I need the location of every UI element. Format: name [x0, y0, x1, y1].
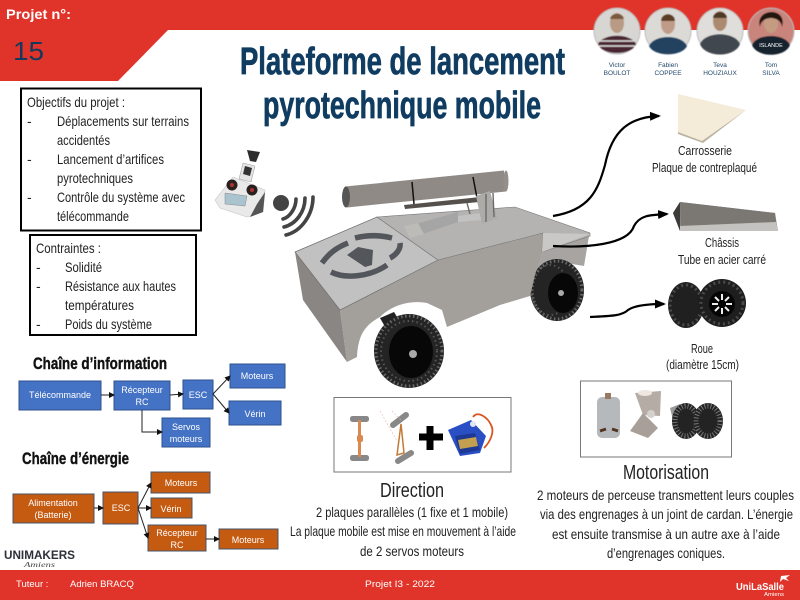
drivetrain text block: d’engrenages coniques.	[607, 545, 725, 561]
tutor label: Tuteur :	[16, 579, 48, 590]
icon: pivoting axle	[380, 411, 411, 461]
panel: project objectives: -	[27, 113, 32, 129]
panel: constraints: températures	[65, 297, 134, 313]
label: project number heading: Projet n°:	[6, 6, 71, 22]
rear wheel	[530, 259, 584, 321]
project number: 15	[13, 36, 44, 66]
logo: Unimakers	[4, 548, 75, 569]
chart: energy chain: RC	[170, 540, 184, 550]
chart: energy chain: (Batterie)	[34, 510, 72, 520]
member: Victor Boulot: BOULOT	[604, 70, 630, 77]
icon: servo motor	[448, 414, 492, 456]
member: Teva Houziaux	[697, 8, 743, 77]
actuator and bracket	[404, 191, 497, 238]
panel: constraints: Poids du système	[65, 316, 152, 332]
component: plywood body	[652, 94, 757, 175]
component: wheels	[666, 279, 746, 372]
component: plywood body: Plaque de contreplaqué	[652, 160, 757, 175]
logo: Unimakers: UNIMAKERS	[4, 548, 75, 562]
hood with gear emblem	[295, 217, 438, 310]
title: Plateforme de lancement	[240, 41, 565, 83]
chart: energy chain	[13, 449, 278, 551]
drivetrain text block: Motorisation	[623, 462, 709, 484]
launch tube	[342, 170, 508, 209]
icon: wireless signal	[273, 195, 313, 235]
steering text block: de 2 servos moteurs	[360, 543, 464, 559]
heading: information chain: Chaîne d’information	[33, 354, 167, 373]
chart: information chain: Récepteur	[121, 385, 163, 395]
component: steel chassis tube: Tube en acier carré	[678, 252, 766, 267]
chart: information chain: Télécommande	[29, 390, 91, 400]
panel: constraints: -	[36, 259, 41, 275]
member: Tom Silva: ISLANDE	[759, 43, 783, 49]
rear body side	[535, 236, 589, 280]
steering text block: La plaque mobile est mise en mouvement à l’aide	[290, 523, 516, 539]
component: steel chassis tube: Châssis	[705, 235, 739, 250]
bottom red banner	[0, 570, 800, 600]
steering text block: Direction	[380, 480, 444, 502]
panel: project objectives: pyrotechniques	[57, 170, 133, 186]
arrow: to wheel	[590, 304, 664, 317]
member: Fabien Coppee: COPPEE	[654, 70, 682, 77]
logo: Unimakers: Amiens	[22, 561, 55, 569]
member: Tom Silva: Tom	[765, 62, 777, 69]
steering text block: 2 plaques parallèles (1 fixe et 1 mobile)	[316, 504, 508, 520]
panel: project objectives: Déplacements sur terrains	[57, 113, 189, 129]
title	[240, 41, 565, 127]
rear deck	[377, 207, 590, 260]
panel: project objectives	[21, 88, 201, 230]
chart: information chain: Vérin	[244, 409, 266, 419]
drivetrain text block	[537, 462, 794, 561]
icon: cardan joint	[630, 390, 661, 438]
logo: UniLaSalle: Amiens	[764, 592, 785, 598]
tutor name: Adrien BRACQ	[70, 579, 134, 590]
icon: remote control	[215, 150, 265, 217]
panel: project objectives: Lancement d’artifices	[57, 151, 164, 167]
chart: energy chain: Moteurs	[165, 478, 198, 488]
arrow: to chassis	[553, 214, 667, 247]
chart: energy chain: Moteurs	[232, 535, 265, 545]
member: Fabien Coppee	[645, 8, 691, 77]
icon: bevel gears	[670, 403, 723, 439]
member: Tom Silva	[748, 8, 794, 77]
panel: constraints: -	[36, 278, 41, 294]
panel: project objectives: télécommande	[57, 208, 129, 224]
steering text block	[290, 480, 516, 559]
panel: constraints	[30, 235, 196, 335]
logo: UniLaSalle	[736, 575, 790, 598]
title: pyrotechnique mobile	[263, 85, 541, 127]
panel: project objectives: accidentés	[57, 132, 110, 148]
front wheel	[374, 312, 444, 388]
chart: energy chain: Alimentation	[28, 498, 78, 508]
component: wheels: (diamètre 15cm)	[666, 357, 739, 372]
panel: project objectives: Contrôle du système avec	[57, 189, 185, 205]
arrow: to carrosserie	[553, 116, 659, 216]
panel: project objectives: -	[27, 189, 32, 205]
project year: Projet I3 - 2022	[365, 579, 435, 590]
member: Teva Houziaux: Teva	[713, 62, 727, 69]
chart: information chain	[19, 354, 285, 447]
member: Teva Houziaux: HOUZIAUX	[703, 70, 737, 77]
panel: constraints: Résistance aux hautes	[65, 278, 176, 294]
icon: drill motor	[597, 393, 620, 438]
chart: information chain: Moteurs	[241, 371, 274, 381]
panel: constraints: -	[36, 316, 41, 332]
body side	[340, 233, 543, 362]
team members	[594, 8, 794, 77]
member: Victor Boulot	[594, 8, 640, 77]
member: Victor Boulot: Victor	[609, 62, 626, 69]
logo: UniLaSalle: UniLaSalle	[736, 581, 784, 593]
top red banner	[0, 0, 800, 81]
panel: drivetrain illustration	[580, 381, 732, 457]
robot platform	[295, 170, 590, 388]
component: wheels: Roue	[691, 341, 713, 356]
member: Fabien Coppee: Fabien	[658, 62, 678, 69]
member: Tom Silva: SILVA	[762, 70, 780, 77]
chart: energy chain: Récepteur	[156, 528, 198, 538]
chart: information chain: ESC	[189, 390, 208, 400]
chart: energy chain: Vérin	[160, 504, 182, 514]
icon: fixed axle	[350, 416, 369, 461]
front face	[295, 252, 347, 362]
panel: steering illustration	[334, 398, 511, 472]
chart: information chain: moteurs	[170, 434, 203, 444]
icon: plus	[419, 426, 443, 450]
panel: constraints: Solidité	[65, 259, 102, 275]
chart: information chain: RC	[136, 397, 149, 407]
panel: project objectives: Objectifs du projet :	[27, 94, 125, 110]
panel: constraints: Contraintes :	[36, 240, 101, 256]
heading: energy chain: Chaîne d’énergie	[22, 449, 129, 468]
component: steel chassis tube	[673, 202, 778, 267]
panel: project objectives: -	[27, 151, 32, 167]
component: plywood body: Carrosserie	[678, 143, 732, 158]
chart: energy chain: ESC	[112, 503, 131, 513]
chart: information chain: Servos	[172, 422, 201, 432]
